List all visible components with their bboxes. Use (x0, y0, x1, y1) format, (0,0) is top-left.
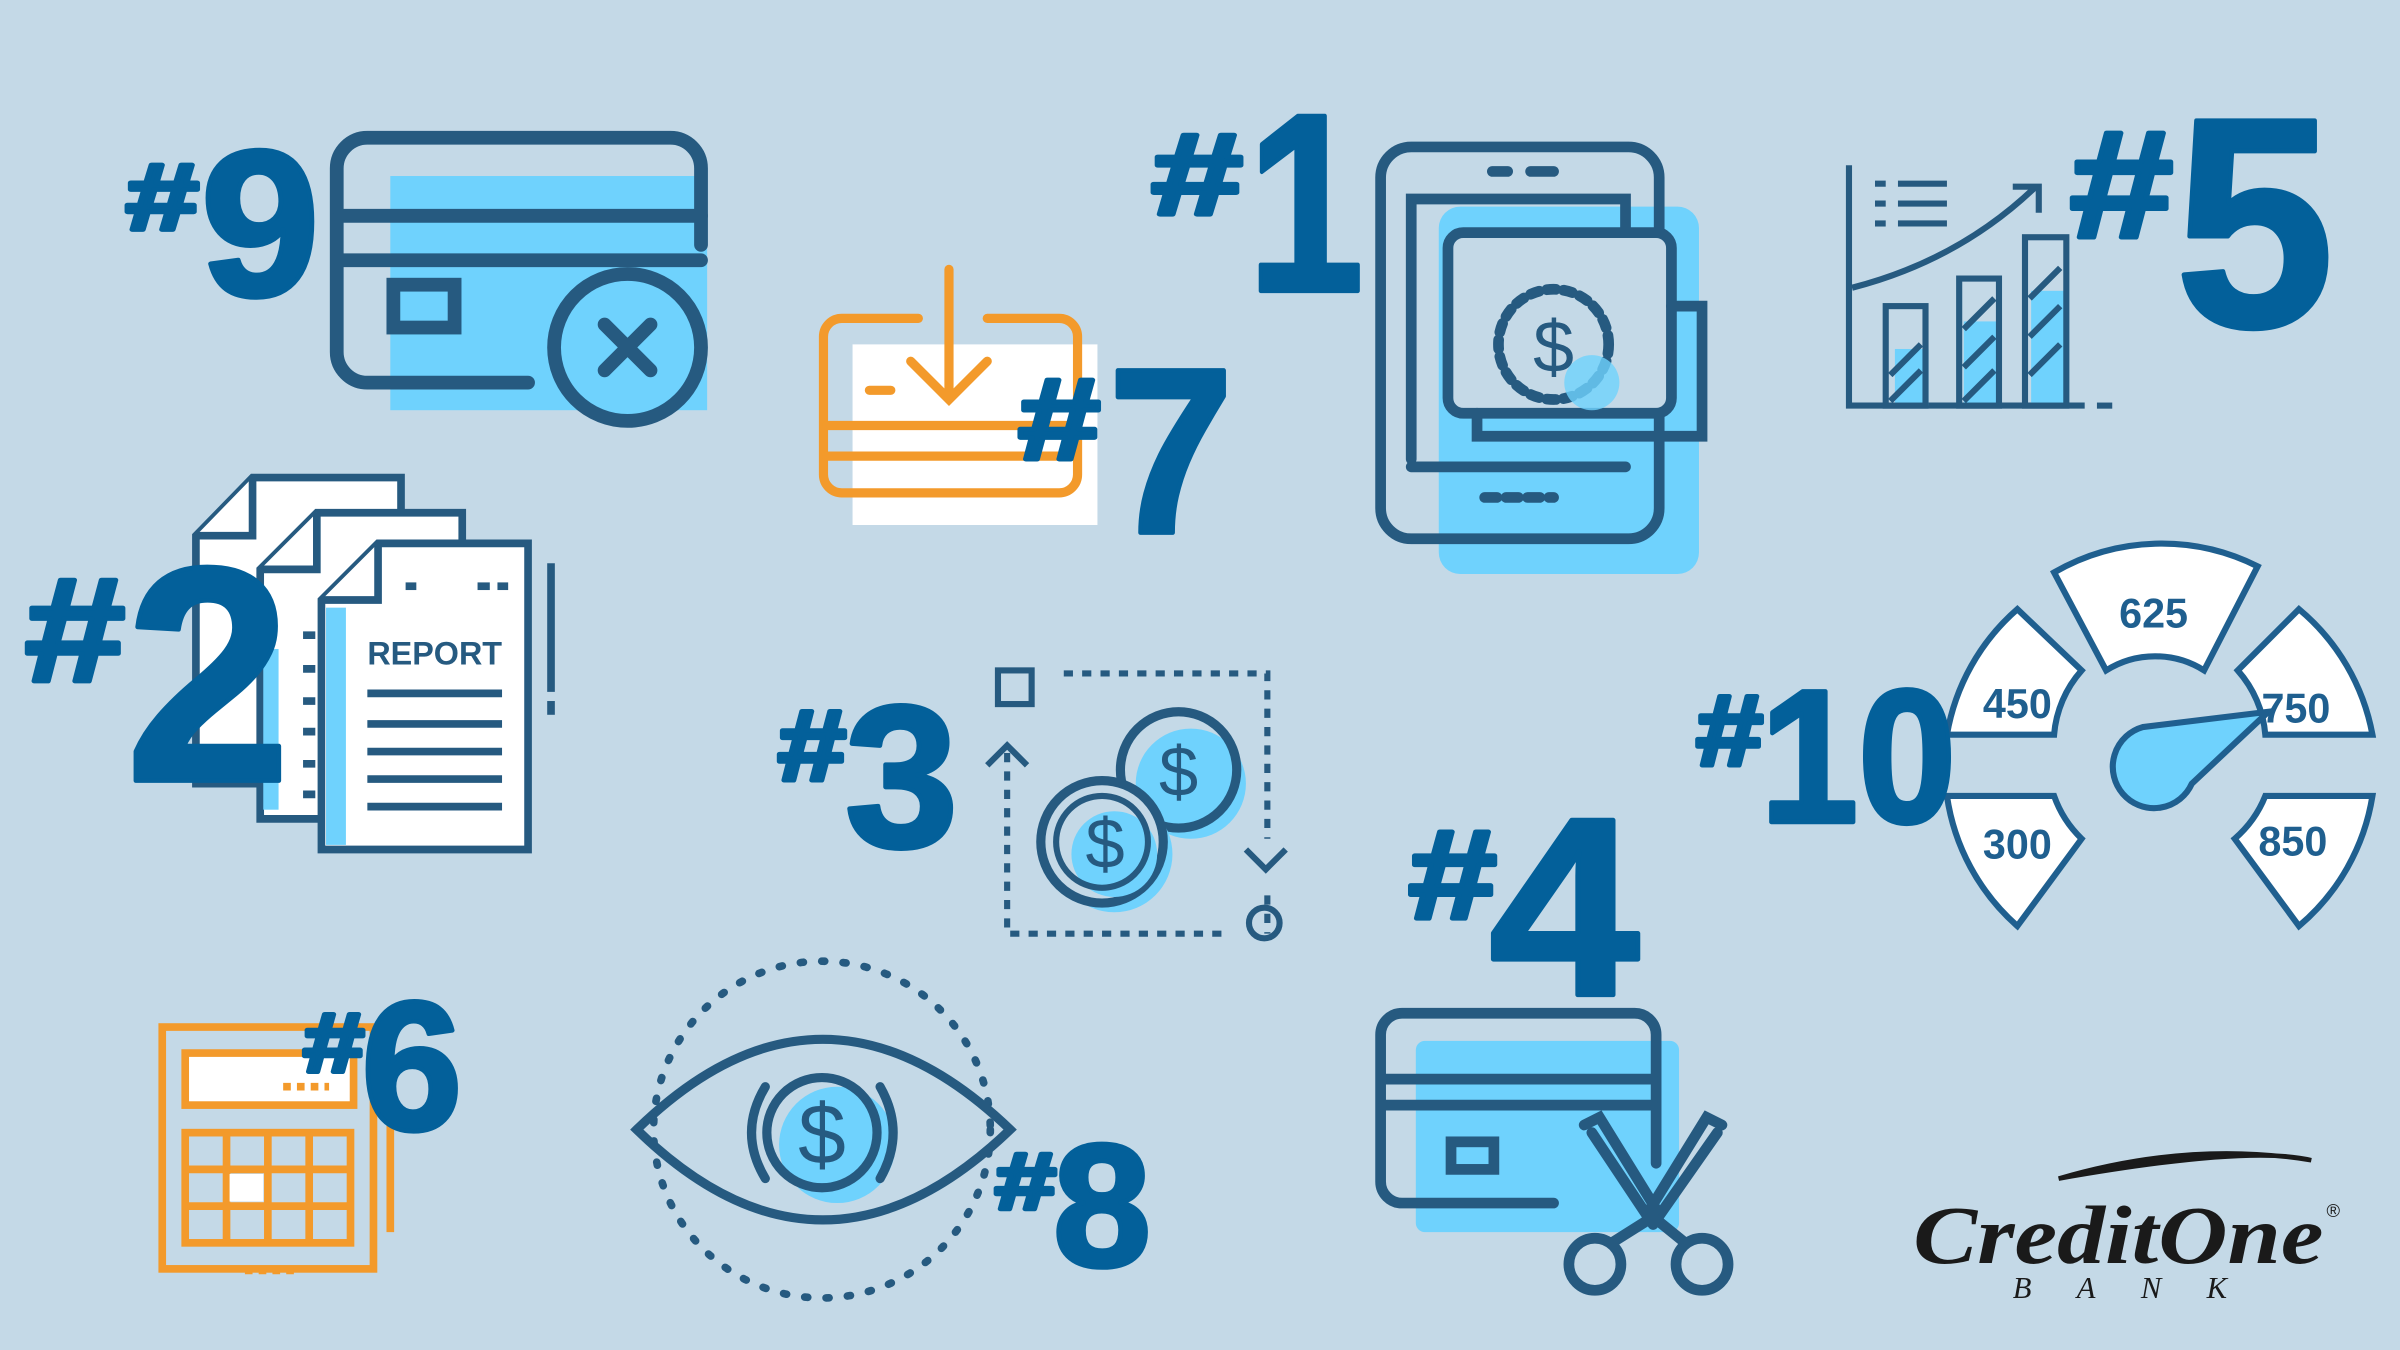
icon: eye with dollar (#8) (637, 961, 1010, 1298)
label #9: # (126, 145, 199, 251)
label #1 (1151, 61, 1364, 345)
icon: credit card with x (#9) (337, 138, 707, 421)
logo: Credit One Bank (1913, 1153, 2341, 1305)
logo: Credit One Bank: BANK (2013, 1271, 2229, 1305)
label #1: # (1151, 109, 1243, 239)
label #9: 9 (201, 108, 320, 340)
label #8: 8 (1053, 1108, 1151, 1303)
logo: Credit One Bank: ® (2327, 1200, 2341, 1221)
icon: card with scissors (#4) (1381, 1013, 1728, 1290)
label #9 (126, 108, 320, 340)
icon: report documents (#2): REPORT (367, 635, 502, 671)
label #4 (1408, 765, 1639, 1049)
icon: coins exchange (#3) (987, 670, 1286, 938)
label #2 (24, 504, 291, 846)
label #10: # (1696, 675, 1763, 787)
label #3 (778, 663, 958, 889)
icon: credit score gauge (#10): 625 (2119, 591, 2188, 637)
icon: tablet with bill (#1) (1381, 147, 1702, 574)
icon: bar chart (#5) (1849, 165, 2112, 406)
label #4: 4 (1489, 765, 1639, 1049)
label #7: # (1018, 354, 1101, 484)
label #3: 3 (845, 663, 958, 889)
icon: coins exchange (#3): $ (1159, 732, 1198, 811)
label #5 (2069, 57, 2334, 390)
label #2: 2 (126, 504, 291, 846)
label #10: 10 (1760, 651, 1956, 863)
label #6 (303, 964, 462, 1169)
label #4: # (1408, 803, 1497, 945)
label #7: 7 (1108, 320, 1234, 583)
label #8: # (995, 1137, 1056, 1227)
icon: credit score gauge (#10): 450 (1983, 681, 2052, 727)
icon: credit score gauge (#10): 300 (1983, 822, 2052, 868)
icon: orange calendar (#6) (162, 1027, 390, 1270)
icon: report documents (#2) (196, 478, 551, 849)
icon: orange card download (#7) (823, 269, 1097, 525)
label #5: # (2069, 99, 2173, 270)
icon: credit score gauge (#10): 850 (2258, 819, 2327, 865)
label #2: # (24, 548, 126, 713)
icon: tablet with bill (#1): $ (1533, 305, 1574, 388)
label #8 (995, 1108, 1151, 1303)
label #7 (1018, 320, 1234, 583)
label #1: 1 (1247, 61, 1364, 345)
label #3: # (778, 691, 846, 803)
label #6: 6 (361, 964, 462, 1169)
icon: credit score gauge (#10) (1947, 544, 2372, 926)
icon: coins exchange (#3): $ (1086, 804, 1125, 883)
icon: eye with dollar (#8): $ (798, 1086, 846, 1182)
label #5: 5 (2175, 57, 2334, 390)
label #6: # (303, 995, 364, 1089)
icon: credit score gauge (#10): 750 (2261, 685, 2330, 731)
logo: Credit One Bank: CreditOne (1913, 1189, 2323, 1281)
